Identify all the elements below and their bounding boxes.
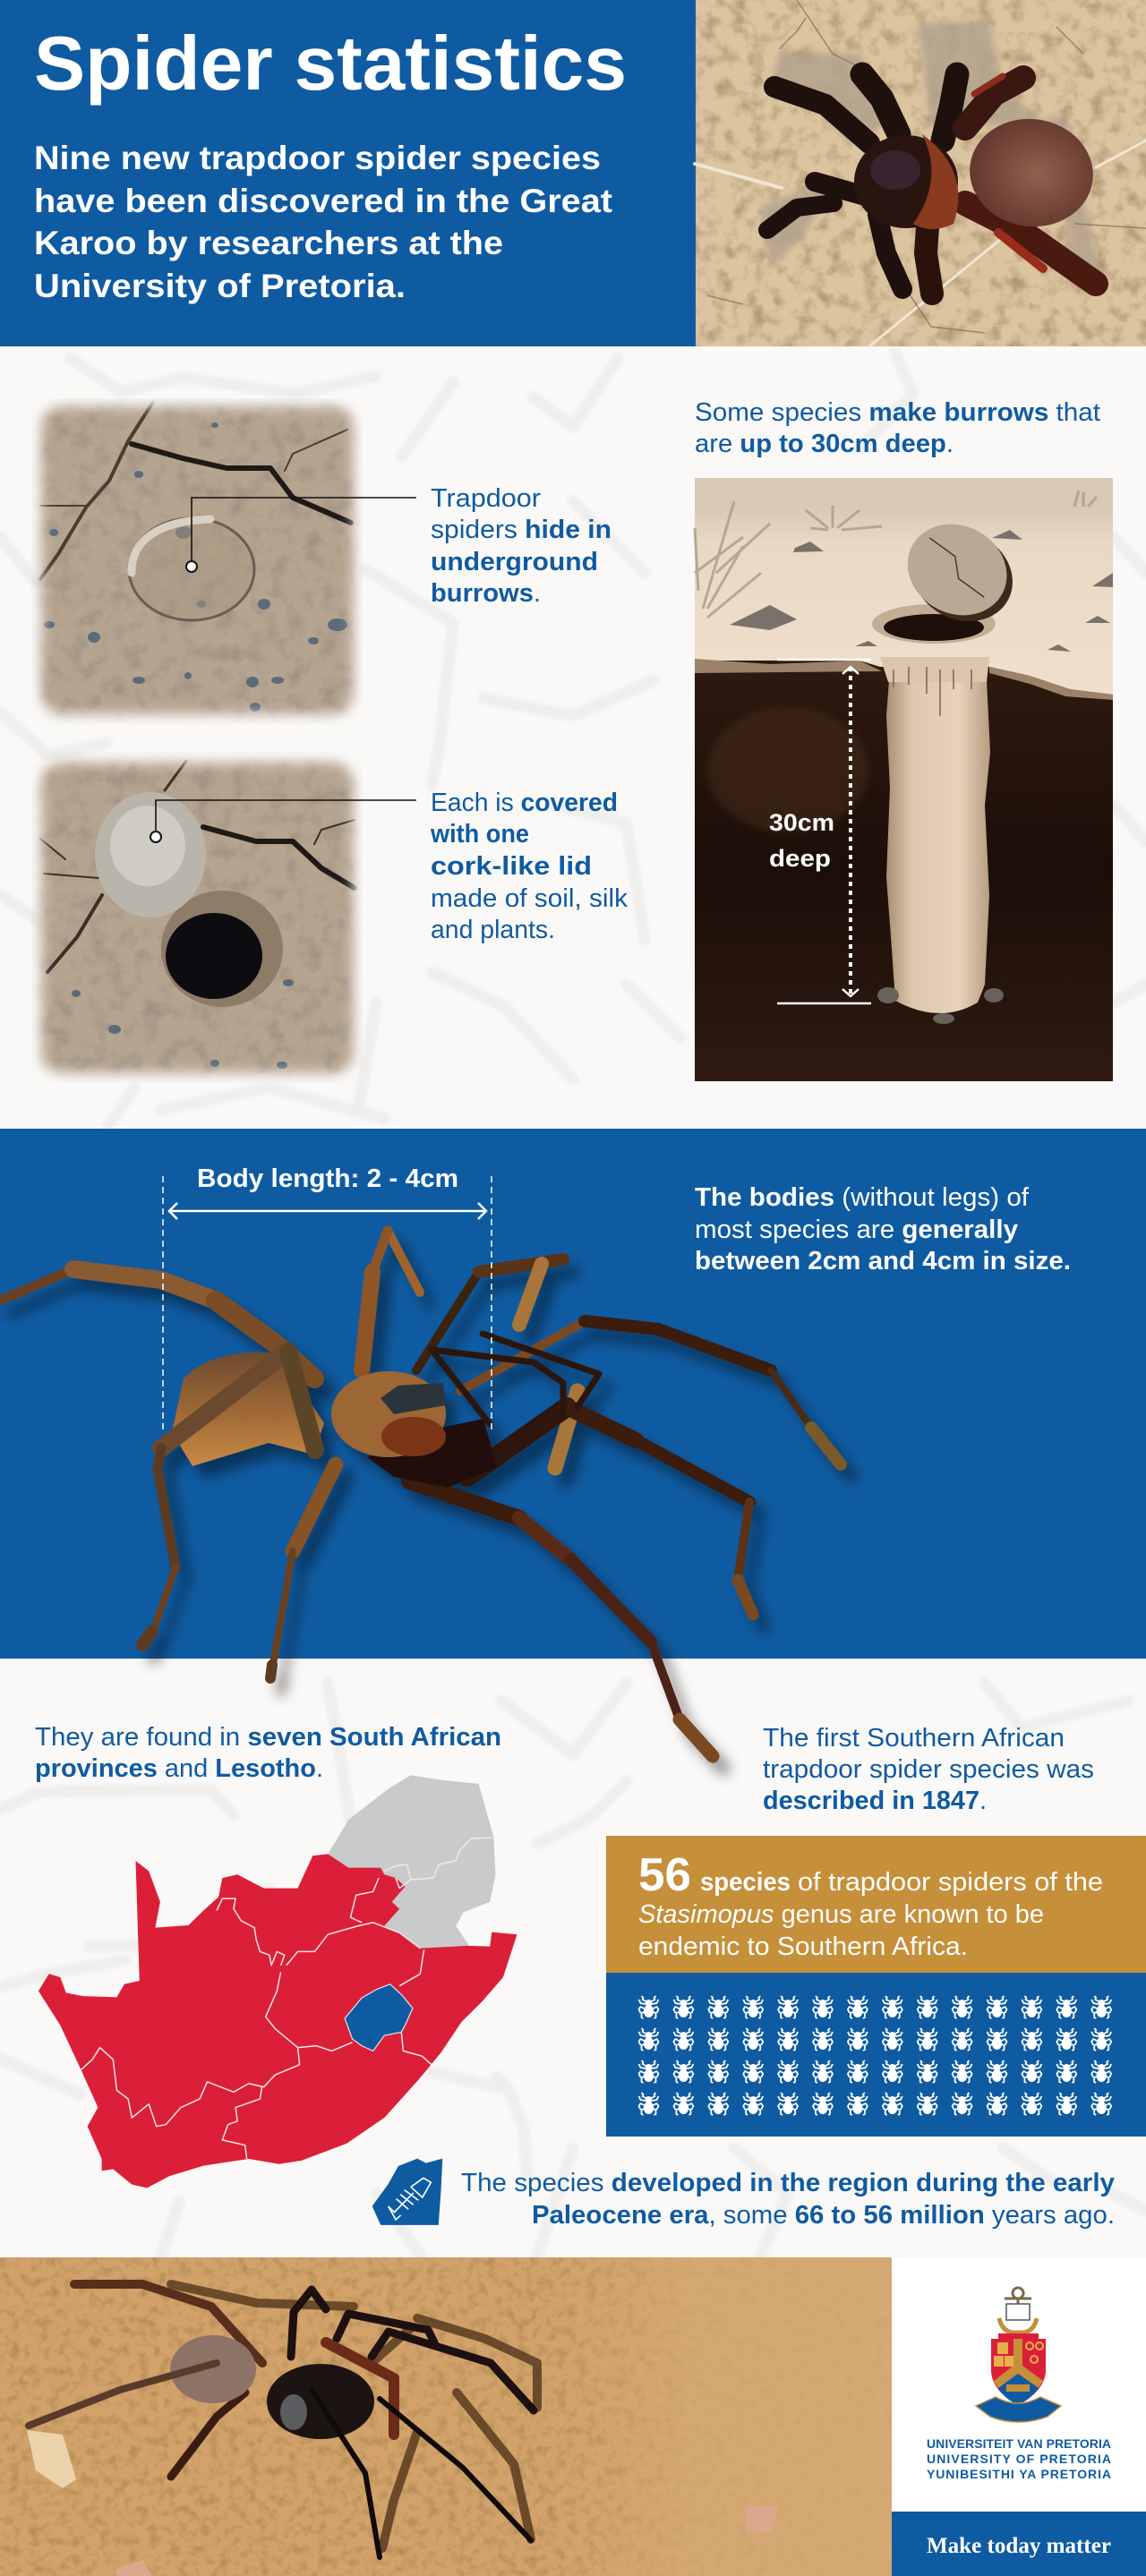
front long legs <box>409 1481 519 1518</box>
text: covered with cork-like lid <box>430 789 629 944</box>
intro text: have been discovered in the Great <box>34 183 612 219</box>
text: covered with cork-like lid: with one <box>430 820 529 849</box>
text: covered with cork-like lid: cork-like lid <box>431 852 592 881</box>
slogan bar <box>892 2512 1146 2576</box>
text: covered with cork-like lid: Each is covered <box>431 789 618 817</box>
text: bodies between 2cm and 4cm: most species are generally <box>695 1215 1018 1244</box>
university names <box>927 2436 1111 2481</box>
icon: fossil fish on map <box>372 2159 442 2225</box>
tufts of grass <box>695 490 1097 618</box>
text: first species described in 1847: trapdoor spider species was <box>763 1755 1094 1784</box>
rocks at burrow base <box>877 987 1004 1024</box>
spider in bottom photo <box>29 2284 534 2557</box>
text: early Paleocene era <box>461 2169 1115 2230</box>
cephalothorax <box>331 1371 446 1457</box>
text: bodies between 2cm and 4cm <box>695 1183 1071 1275</box>
intro text <box>34 140 612 304</box>
pedipalps <box>432 1334 599 1424</box>
far left leg <box>0 1269 314 1378</box>
header panel <box>0 0 696 346</box>
spider in header photo <box>767 74 1100 294</box>
text: 56 species: of trapdoor spiders of the <box>798 1868 1103 1897</box>
text: bodies between 2cm and 4cm: between 2cm and 4cm in size. <box>695 1247 1071 1275</box>
text: burrows up to 30cm deep <box>695 398 1100 458</box>
intro text: Nine new trapdoor spider species <box>34 140 601 176</box>
text: 56 species: Stasimopus genus are known to be <box>638 1900 1044 1929</box>
slogan bar: Make today matter <box>927 2534 1111 2558</box>
burrow entrance <box>872 604 996 644</box>
text: 56 species: species <box>700 1868 791 1897</box>
label: body length: Body length: 2 - 4cm <box>197 1164 458 1193</box>
text: hide in underground burrows: underground <box>431 548 598 576</box>
text: hide in underground burrows: burrows. <box>431 579 541 608</box>
photo: open burrow with lid <box>31 752 363 1083</box>
lid outline <box>129 518 254 620</box>
text: hide in underground burrows: spiders hide in <box>431 516 611 544</box>
bottom photo: spider on red sand <box>0 2257 892 2576</box>
depth label: 30cm <box>769 809 834 836</box>
burrow shaft <box>886 680 990 1013</box>
depth marker <box>777 660 871 1003</box>
icons: 56 spiders <box>639 1996 1111 2115</box>
intro text: University of Pretoria. <box>34 268 406 304</box>
depth label <box>769 809 834 872</box>
intro text: Karoo by researchers at the <box>34 225 503 261</box>
panel: body size band <box>0 1129 1146 1659</box>
text: seven provinces and Lesotho <box>35 1723 501 1783</box>
logo panel <box>892 2257 1146 2512</box>
title: Spider statistics <box>34 21 627 107</box>
text: first species described in 1847: The first Southern African <box>763 1724 1065 1753</box>
panel: 56 species <box>606 1836 1146 2137</box>
text: covered with cork-like lid: and plants. <box>431 916 555 944</box>
province borders <box>81 1838 492 2159</box>
text: covered with cork-like lid: made of soil, silk <box>431 884 629 913</box>
text: 56 species: 56 <box>638 1849 691 1901</box>
text: burrows up to 30cm deep: Some species make burrows that <box>695 398 1100 427</box>
text: bodies between 2cm and 4cm: The bodies (without legs) of <box>695 1183 1030 1212</box>
illustration: burrow cross-section <box>695 478 1113 1081</box>
text: 56 species: endemic to Southern Africa. <box>638 1932 968 1961</box>
text: hide in underground burrows <box>431 484 611 608</box>
photo: closed burrow lid <box>31 398 363 725</box>
text: hide in underground burrows: Trapdoor <box>431 484 541 513</box>
map of South Africa and Lesotho <box>38 1775 517 2188</box>
large spider cut-out <box>0 1231 841 1756</box>
Lesotho <box>345 1984 413 2051</box>
provinces without species <box>328 1775 495 1949</box>
callout: burrow pointer <box>186 498 416 572</box>
rocks <box>730 530 1113 652</box>
depth label: deep <box>769 845 831 872</box>
university names: UNIVERSITY OF PRETORIA <box>927 2452 1111 2466</box>
provinces with species <box>38 1854 517 2188</box>
spider underside <box>367 1419 497 1488</box>
callout: lid pointer <box>150 800 416 842</box>
text: early Paleocene era: Paleocene era, some 66 to 56 million years ago. <box>532 2201 1115 2230</box>
cracked earth background pattern <box>0 354 1146 2256</box>
text: burrows up to 30cm deep: are up to 30cm deep. <box>695 430 954 458</box>
burrow lid <box>890 508 1030 638</box>
back legs <box>362 1231 841 1468</box>
abdomen <box>172 1352 324 1466</box>
university names: UNIVERSITEIT VAN PRETORIA <box>927 2436 1111 2451</box>
text: seven provinces and Lesotho: provinces and Lesotho. <box>35 1754 323 1783</box>
header photo: trapdoor spider on sand <box>695 0 1146 346</box>
text: 56 species <box>638 1849 1103 1961</box>
university crest <box>976 2288 1061 2422</box>
text: early Paleocene era: The species developed in the region during the early <box>461 2169 1115 2197</box>
cast shadows <box>171 2284 537 2548</box>
university names: YUNIBESITHI YA PRETORIA <box>927 2467 1111 2481</box>
text: first species described in 1847: described in 1847. <box>763 1787 987 1815</box>
text: first species described in 1847 <box>763 1724 1094 1815</box>
text: seven provinces and Lesotho: They are found in seven South African <box>35 1723 501 1752</box>
dimension lines <box>163 1176 492 1432</box>
